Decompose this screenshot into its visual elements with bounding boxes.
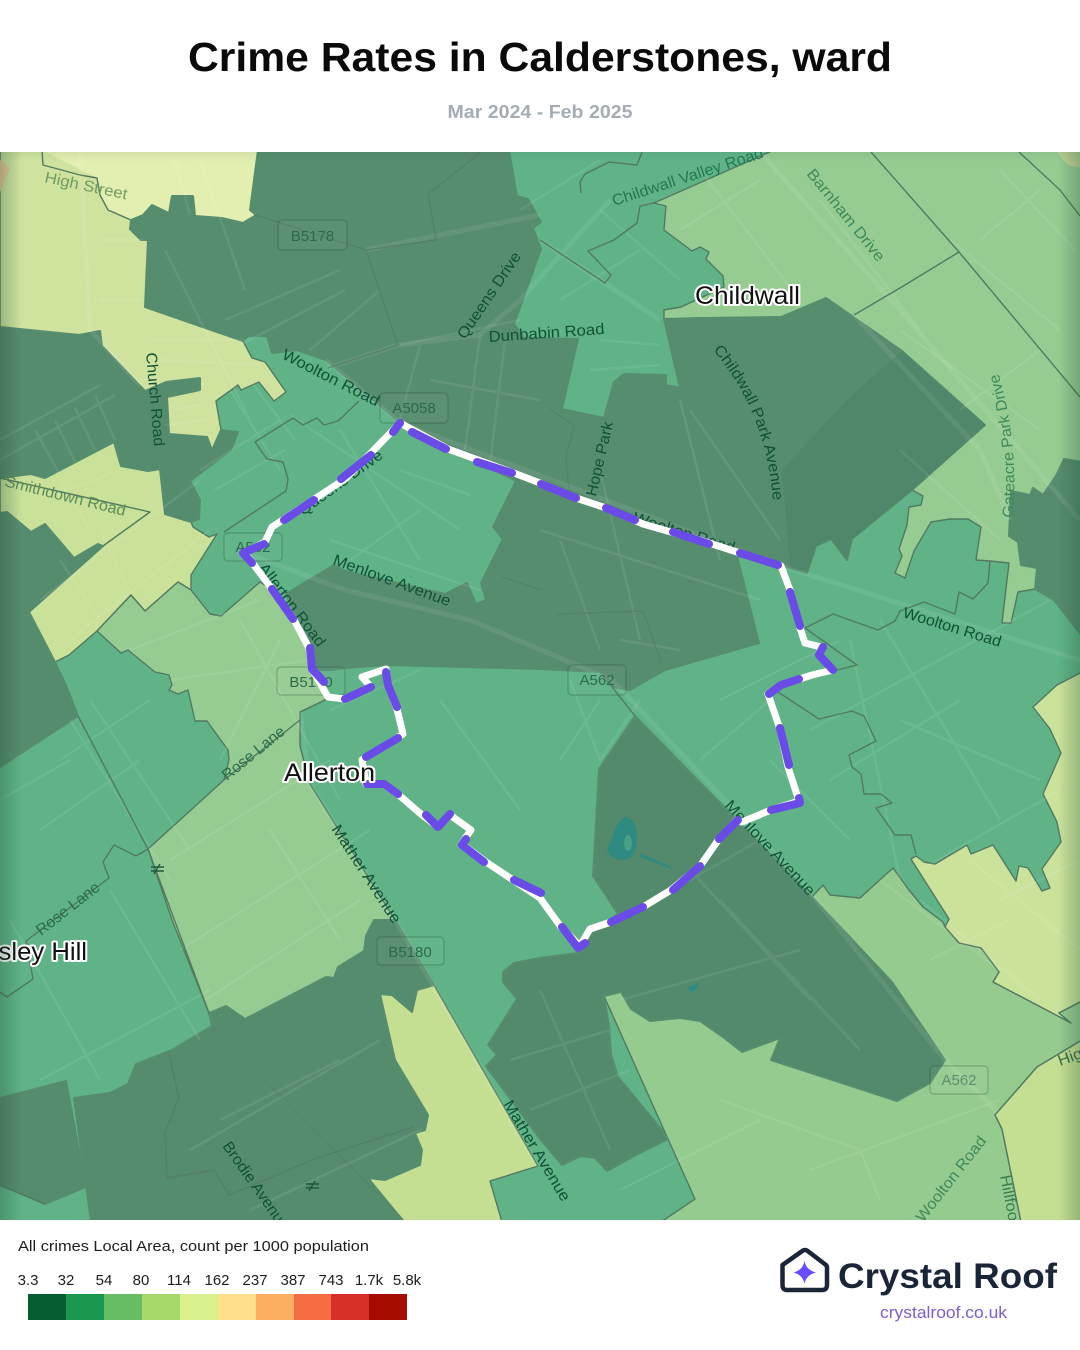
area: dark east: [1009, 459, 1080, 636]
legend scale labels: 54: [96, 1272, 112, 1289]
road labels: Woolton Road: [279, 346, 382, 410]
area: dark west: [0, 327, 238, 522]
road labels: Rose Lane: [33, 879, 103, 939]
area: pale yellow Mather Avenue: [368, 985, 538, 1222]
road shield: B5178: B5178: [291, 228, 334, 245]
area: pale yellow north-west: [0, 150, 286, 450]
road shield: A562 south-east: A562: [941, 1072, 977, 1089]
road shield: A562 north-west: A562: [235, 539, 271, 556]
road labels: Gateacre Park Drive: [992, 374, 1014, 517]
road shield: B5178: [278, 220, 347, 250]
road labels: Menlove Avenue: [331, 552, 453, 610]
subtitle: date range: Mar 2024 - Feb 2025: [448, 101, 632, 122]
legend scale labels: 1.7k: [355, 1272, 384, 1289]
legend scale labels: 743: [318, 1272, 344, 1289]
legend scale labels: 162: [204, 1272, 230, 1289]
road shield: B5180 south: [377, 937, 444, 965]
legend scale labels: [18, 1272, 422, 1289]
road shield: A5058: [380, 393, 448, 423]
area: light green south-east: [604, 868, 1080, 1222]
legend title: All crimes Local Area, count per 1000 population: [18, 1238, 369, 1255]
road shield: B5180: [277, 667, 345, 695]
lake: [607, 817, 700, 993]
road shield: A5058: A5058: [392, 400, 436, 417]
area: yellow east: [911, 672, 1080, 1023]
road labels: Church Road: [142, 352, 167, 447]
road labels: Queens Drive: [454, 249, 525, 342]
legend scale labels: 237: [242, 1272, 268, 1289]
place label: Childwall: Childwall: [695, 282, 800, 310]
road labels: Childwall Valley Road: [610, 145, 766, 210]
road labels: Hope Park: [583, 420, 617, 498]
area: palest yellow High Street: [42, 150, 258, 223]
area: olive north-east corner: [1057, 152, 1080, 168]
area: darker park patch: [782, 351, 985, 573]
area: dark Calderstones park and south: [486, 716, 945, 1171]
icon: house with star: [782, 1250, 827, 1290]
road labels: Dunbabin Road: [488, 321, 605, 346]
road labels: Smithdown Road: [3, 473, 127, 520]
road labels: Queens Drive: [295, 447, 386, 519]
road labels: Woolton Road: [631, 510, 737, 557]
area: main dark band north of ward: [130, 150, 985, 690]
road shield: B5180: B5180: [289, 674, 333, 691]
road labels: Hillfoot Road: [996, 1174, 1031, 1271]
road shield: A562 north-west: [224, 533, 282, 561]
road labels: Barnham Drive: [803, 166, 888, 265]
legend scale labels: 5.8k: [393, 1272, 422, 1289]
area: light green Allerton: [97, 582, 395, 1019]
road shield: A562 centre: A562: [579, 672, 615, 689]
legend scale labels: 387: [280, 1272, 306, 1289]
road shield: B5180 south: B5180: [388, 944, 432, 961]
legend: [18, 1238, 422, 1320]
legend scale labels: 80: [133, 1272, 149, 1289]
legend colour bar: [28, 1294, 407, 1320]
purple dashes: [243, 423, 833, 948]
area: pale yellow south-east corner: [995, 1040, 1080, 1222]
street network: [0, 150, 1080, 1210]
ward and local boundary lines: [0, 152, 1080, 1220]
road labels: Allerton Road: [255, 560, 329, 650]
rail station icons: [151, 864, 319, 1191]
road labels: Woolton Road: [913, 1133, 990, 1225]
road shield: A562 centre: [568, 665, 626, 695]
area: orange corner: [0, 160, 10, 192]
ward boundary: Calderstones: [243, 423, 833, 948]
legend scale labels: 32: [58, 1272, 74, 1289]
road labels: Rose Lane: [219, 723, 289, 784]
wordmark: Crystal Roof: [838, 1257, 1057, 1296]
area: dark south-west: [0, 1081, 86, 1204]
road labels: Menlove Avenue: [721, 797, 818, 899]
area: dark south-west of Smithdown: [0, 512, 103, 767]
place label: Allerton: Allerton: [284, 759, 375, 787]
road labels: Mather Avenue: [328, 822, 404, 927]
website url: crystalroof.co.uk: [880, 1304, 1008, 1322]
legend scale labels: 114: [167, 1272, 191, 1289]
area: pale Smithdown Road: [0, 442, 217, 662]
road labels: High Street: [43, 169, 130, 204]
road labels: Brodie Avenue: [219, 1139, 292, 1233]
legend scale labels: 3.3: [18, 1272, 38, 1289]
road labels: Mather Avenue: [500, 1097, 573, 1205]
logo: Crystal Roof: [782, 1250, 1057, 1322]
road labels: Woolton Road: [901, 605, 1003, 651]
map edge shading: [0, 152, 1080, 1220]
title: Crime Rates in Calderstones, ward: [188, 34, 892, 80]
road labels: Childwall Park Avenue: [716, 346, 781, 500]
white boundary base: [245, 423, 833, 946]
area: light green north-east: [654, 150, 1080, 623]
pond highlight: [624, 835, 632, 851]
road shield: A562 south-east: [930, 1066, 988, 1094]
